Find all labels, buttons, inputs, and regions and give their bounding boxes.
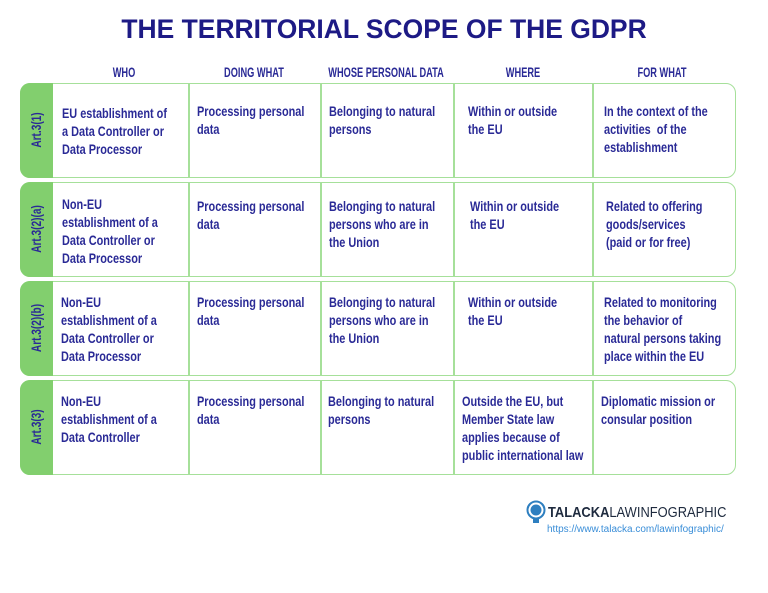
cell text	[601, 393, 715, 427]
cell text	[328, 393, 434, 427]
tab label: Art.3(1)	[28, 112, 44, 148]
cell text: the EU	[468, 312, 503, 328]
cell text: In the context of the	[604, 103, 708, 119]
cell text: establishment of a	[61, 411, 157, 427]
logo	[526, 500, 726, 535]
cell text	[197, 198, 304, 232]
title: THE TERRITORIAL SCOPE OF THE GDPR	[121, 14, 647, 44]
cell text: Belonging to natural	[329, 198, 435, 214]
cell text: data	[197, 216, 219, 232]
cell text	[468, 294, 557, 328]
cell text: consular position	[601, 411, 692, 427]
cell text	[329, 198, 435, 250]
cell text: persons who are in	[329, 216, 429, 232]
cell text: (paid or for free)	[606, 234, 690, 250]
cell text	[462, 393, 584, 463]
cell text: establishment	[604, 139, 677, 155]
row: Art.3(2)(b)	[20, 281, 736, 376]
cell text	[604, 294, 721, 364]
cell text: activities of the	[604, 121, 687, 137]
cell text	[197, 103, 304, 137]
cell text: Processing personal	[197, 294, 304, 310]
cell text	[604, 103, 708, 155]
row: Art.3(2)(a)	[20, 182, 736, 277]
tab label	[20, 280, 52, 376]
cell text: Within or outside	[470, 198, 559, 214]
cell text: Within or outside	[468, 294, 557, 310]
cell text	[606, 198, 702, 250]
header: where: WHERE	[506, 64, 540, 80]
cell text: Processing personal	[197, 103, 304, 119]
cell text: Data Controller	[61, 429, 140, 445]
cell text: a Data Controller or	[62, 123, 164, 139]
cell text	[197, 393, 304, 427]
cell text: Non-EU	[61, 393, 101, 409]
cell text: Belonging to natural	[329, 103, 435, 119]
cell text: Data Processor	[62, 141, 142, 157]
cell text: Diplomatic mission or	[601, 393, 715, 409]
url: https://www.talacka.com/lawinfographic/	[547, 524, 724, 535]
tab label	[20, 82, 52, 178]
cell text: Data Processor	[62, 250, 142, 266]
cell text: the EU	[470, 216, 505, 232]
cell text	[468, 103, 557, 137]
cell text: Member State law	[462, 411, 554, 427]
cell text: place within the EU	[604, 348, 704, 364]
cell text: the behavior of	[604, 312, 682, 328]
cell text: goods/services	[606, 216, 686, 232]
cell text: Belonging to natural	[329, 294, 435, 310]
cell text	[197, 294, 304, 328]
tab label: Art.3(3)	[28, 409, 44, 445]
cell text: data	[197, 121, 219, 137]
cell text: Belonging to natural	[328, 393, 434, 409]
header: who: WHO	[113, 64, 135, 80]
cell text: Related to monitoring	[604, 294, 717, 310]
cell text: Related to offering	[606, 198, 702, 214]
cell text: Processing personal	[197, 198, 304, 214]
cell text: Non-EU	[61, 294, 101, 310]
cell text: establishment of a	[62, 214, 158, 230]
cell text: Data Controller or	[62, 232, 155, 248]
cell text: Within or outside	[468, 103, 557, 119]
cell text: persons	[328, 411, 370, 427]
cell text	[61, 294, 157, 364]
cell text	[61, 393, 157, 445]
row: Art.3(3)	[20, 380, 736, 475]
cell text: the Union	[329, 234, 379, 250]
logo text: TALACKALAWINFOGRAPHIC	[548, 504, 726, 521]
cell text: natural persons taking	[604, 330, 721, 346]
cell text	[62, 196, 158, 266]
cell text: data	[197, 312, 219, 328]
cell text: Processing personal	[197, 393, 304, 409]
header: whose personal data: WHOSE PERSONAL DATA	[328, 64, 444, 80]
cell text: persons	[329, 121, 371, 137]
cell text: Data Controller or	[61, 330, 154, 346]
tab label: Art.3(2)(b)	[28, 304, 44, 352]
header: doing what: DOING WHAT	[224, 64, 284, 80]
header: for what: FOR WHAT	[637, 64, 687, 80]
cell text: establishment of a	[61, 312, 157, 328]
cell text: Data Processor	[61, 348, 141, 364]
cell text: the Union	[329, 330, 379, 346]
tab label	[20, 182, 52, 276]
cell text	[329, 103, 435, 137]
cell text: Outside the EU, but	[462, 393, 563, 409]
cell text: the EU	[468, 121, 503, 137]
column headers	[112, 64, 687, 80]
cell text: public international law	[462, 447, 583, 463]
cell text: applies because of	[462, 429, 560, 445]
row: Art.3(1)	[20, 83, 736, 178]
tab label: Art.3(2)(a)	[28, 205, 44, 253]
tab label	[20, 380, 52, 474]
cell text	[329, 294, 435, 346]
cell text: EU establishment of	[62, 105, 167, 121]
cell text	[470, 198, 559, 232]
cell text: persons who are in	[329, 312, 429, 328]
icon: globe bulb	[526, 500, 546, 523]
cell text	[62, 105, 168, 157]
cell text: Non-EU	[62, 196, 102, 212]
cell text: data	[197, 411, 219, 427]
